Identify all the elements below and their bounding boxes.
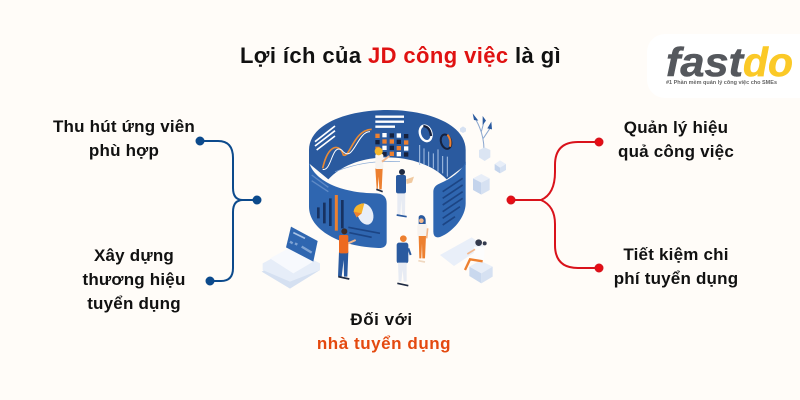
logo: fastdo: fast	[666, 39, 745, 85]
ring left front panel	[309, 162, 387, 248]
left connector bracket	[196, 138, 260, 284]
person: man orange hair	[397, 235, 411, 286]
person: woman orange trousers at wall	[375, 147, 389, 192]
ring back wall	[309, 110, 466, 179]
right benefits text: Tiết kiệm chi	[623, 245, 729, 264]
plant and cubes	[460, 113, 506, 195]
laptop on books	[262, 227, 320, 289]
right benefits text: Quản lý hiệu	[624, 118, 728, 137]
person: man with tablet	[396, 169, 414, 217]
logo: fastdo: #1 Phần mềm quản lý công việc cho SMEs	[666, 80, 777, 86]
person: man pointing at panel	[338, 228, 356, 279]
logo: fastdo	[647, 34, 800, 98]
left benefits text: tuyển dụng	[87, 294, 181, 313]
person: woman blue hair	[417, 215, 428, 262]
logo: fastdo: do	[743, 39, 793, 85]
donut charts	[418, 124, 453, 150]
left benefits text	[53, 117, 195, 313]
audience caption	[317, 310, 451, 353]
right benefits text: quả công việc	[618, 142, 734, 161]
audience caption: Đối với	[350, 310, 413, 329]
right benefits text: phí tuyển dụng	[614, 269, 738, 288]
person at desk	[440, 237, 493, 283]
audience caption: nhà tuyển dụng	[317, 334, 451, 353]
left benefits text: Thu hút ứng viên	[53, 117, 195, 136]
right connector bracket	[508, 138, 602, 272]
title: Lợi ích của JD công việc là gì	[240, 43, 561, 68]
heatmap	[375, 133, 408, 157]
ring right front panel	[433, 162, 466, 237]
right benefits text	[614, 118, 738, 288]
left benefits text: Xây dựng	[94, 246, 174, 265]
illustration: data ring with people	[262, 110, 506, 289]
left benefits text: phù hợp	[89, 141, 159, 160]
left benefits text: thương hiệu	[82, 270, 186, 289]
